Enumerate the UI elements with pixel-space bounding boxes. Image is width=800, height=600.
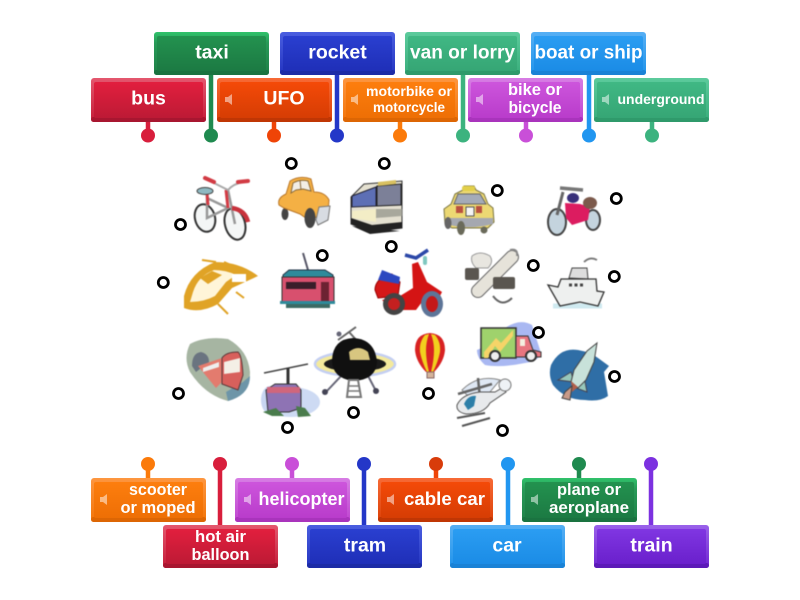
- icon: ship: [548, 258, 604, 306]
- label: bike or bicycle: bike or: [508, 81, 563, 99]
- label: cable car: [378, 478, 493, 522]
- icon: cable car: [261, 364, 320, 417]
- label: scooter or moped: or moped: [120, 499, 196, 517]
- label: underground: underground: [618, 91, 704, 107]
- connector lines and pins: bottom labels: [141, 457, 658, 526]
- label: bus: bus: [131, 88, 166, 110]
- label: cable car: cable car: [404, 489, 485, 509]
- icon: bus: [351, 180, 402, 234]
- label: taxi: taxi: [195, 42, 229, 64]
- label: car: [450, 525, 565, 568]
- label: car: car: [492, 534, 522, 556]
- label: underground: [594, 78, 709, 122]
- label: helicopter: helicopter: [258, 489, 344, 509]
- icon: motorbike: [548, 188, 600, 235]
- label: van or lorry: van or lorry: [410, 42, 515, 64]
- label: motorbike or motorcycle: [343, 78, 458, 122]
- label: bus: [91, 78, 206, 122]
- icon: underground train: [186, 338, 250, 401]
- label: helicopter: [235, 478, 350, 522]
- label: hot air balloon: balloon: [192, 546, 250, 564]
- label: plane or aeroplane: plane or: [557, 481, 622, 499]
- label: rocket: [280, 32, 395, 75]
- label: rocket: rocket: [308, 42, 367, 64]
- label: tram: tram: [344, 534, 386, 556]
- label: taxi: [154, 32, 269, 75]
- label: plane or aeroplane: aeroplane: [549, 499, 629, 517]
- label: bike or bicycle: bicycle: [508, 99, 562, 117]
- label: van or lorry: [405, 32, 520, 75]
- label: train: [594, 525, 709, 568]
- label: scooter or moped: [91, 478, 206, 522]
- label: hot air balloon: hot air: [195, 528, 247, 546]
- icon: car: [279, 177, 330, 228]
- label: scooter or moped: scooter: [129, 481, 188, 499]
- label: tram: [307, 525, 422, 568]
- icon: helicopter: [457, 378, 511, 426]
- icon: UFO: [315, 327, 395, 397]
- connector lines and pins: top labels: [141, 75, 659, 142]
- label: motorbike or motorcycle: motorbike or: [366, 83, 453, 99]
- label: boat or ship: boat or ship: [534, 42, 643, 64]
- icon: rocket: [550, 343, 609, 400]
- icon: bicycle: [192, 178, 249, 242]
- label: bike or bicycle: [468, 78, 583, 122]
- label: boat or ship: [531, 32, 646, 75]
- icon: plane: [465, 250, 517, 303]
- icon: hot air balloon: [415, 333, 445, 378]
- label: plane or aeroplane: [522, 478, 637, 522]
- icon: scooter: [375, 250, 443, 317]
- drop targets: hollow black circles: [158, 158, 621, 436]
- label: UFO: UFO: [263, 88, 305, 110]
- label: motorbike or motorcycle: motorcycle: [373, 99, 445, 115]
- label: UFO: [217, 78, 332, 122]
- icon: train: [184, 260, 258, 314]
- icon: truck: [477, 322, 541, 366]
- icon: taxi: [444, 186, 494, 235]
- label: train: train: [630, 534, 673, 556]
- icon: tram: [280, 253, 335, 308]
- label: hot air balloon: [163, 525, 278, 568]
